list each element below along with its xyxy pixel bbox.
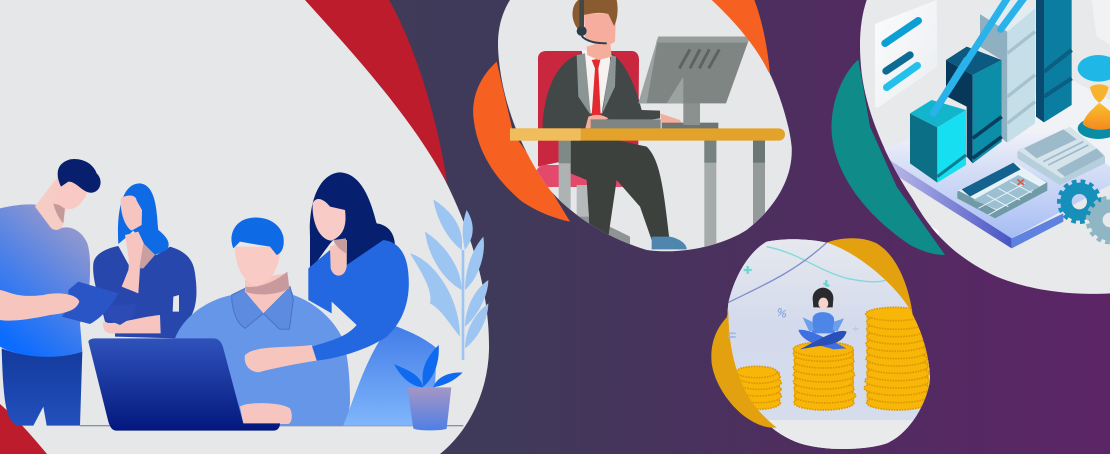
agent bbox=[543, 0, 687, 250]
grey blob bbox=[0, 0, 489, 454]
orange accent left bbox=[473, 62, 570, 222]
faint document bbox=[1092, 0, 1110, 45]
laptop bbox=[88, 338, 280, 431]
floor bbox=[772, 420, 914, 449]
office chair bbox=[536, 51, 639, 247]
math symbols bbox=[744, 266, 859, 336]
math symbols: ÷ bbox=[853, 324, 859, 336]
woman blue hair bbox=[93, 183, 196, 338]
stacked documents bbox=[1017, 127, 1105, 185]
panel: call-centre agent blob bbox=[473, 0, 792, 253]
grey blob bbox=[498, 0, 792, 251]
teal bar bbox=[946, 47, 1002, 163]
desk legs bbox=[558, 140, 765, 247]
report poster bbox=[875, 0, 937, 107]
light bar bbox=[980, 0, 1035, 143]
grey blob bbox=[728, 239, 930, 449]
document in hand bbox=[62, 282, 118, 324]
monitor and keyboard bbox=[591, 37, 750, 129]
equals symbol bbox=[728, 333, 736, 337]
man centre bbox=[110, 217, 350, 426]
grey blob bbox=[860, 0, 1110, 294]
panel: finance charts blob bbox=[831, 0, 1110, 294]
math symbols: % bbox=[775, 306, 788, 321]
coin stack middle bbox=[793, 342, 856, 410]
red accent top bbox=[300, 0, 447, 182]
potted plant bbox=[394, 345, 463, 430]
gold accent top bbox=[827, 238, 913, 320]
floor sheet bbox=[884, 80, 1110, 166]
man forearm bbox=[0, 290, 79, 321]
red accent bottom bbox=[0, 404, 47, 454]
floor line bbox=[80, 425, 463, 426]
plant background bbox=[410, 199, 488, 360]
coin stack small bbox=[736, 366, 781, 409]
desk top bbox=[510, 128, 785, 141]
panel: savings coins blob bbox=[711, 238, 930, 449]
gears bbox=[1059, 182, 1110, 242]
hourglass bbox=[1078, 55, 1110, 139]
gold accent left bbox=[711, 310, 777, 428]
panel: team blob bbox=[0, 0, 489, 454]
platform bbox=[884, 142, 1110, 248]
coin stack large bbox=[864, 307, 930, 410]
cyan bar bbox=[910, 60, 967, 183]
orange accent right bbox=[712, 0, 770, 75]
trend lines bbox=[727, 243, 887, 303]
trend arrow bbox=[933, 0, 1025, 113]
far bar bbox=[1036, 0, 1072, 122]
pointing arm bbox=[245, 345, 317, 372]
meditating woman bbox=[798, 288, 847, 349]
backdrop bbox=[728, 239, 930, 420]
teal accent bbox=[831, 59, 945, 255]
calendar bbox=[957, 163, 1047, 218]
team illustration bbox=[0, 159, 488, 431]
woman right bbox=[308, 172, 437, 426]
man left bbox=[0, 159, 101, 426]
white highlight bbox=[930, 226, 939, 235]
